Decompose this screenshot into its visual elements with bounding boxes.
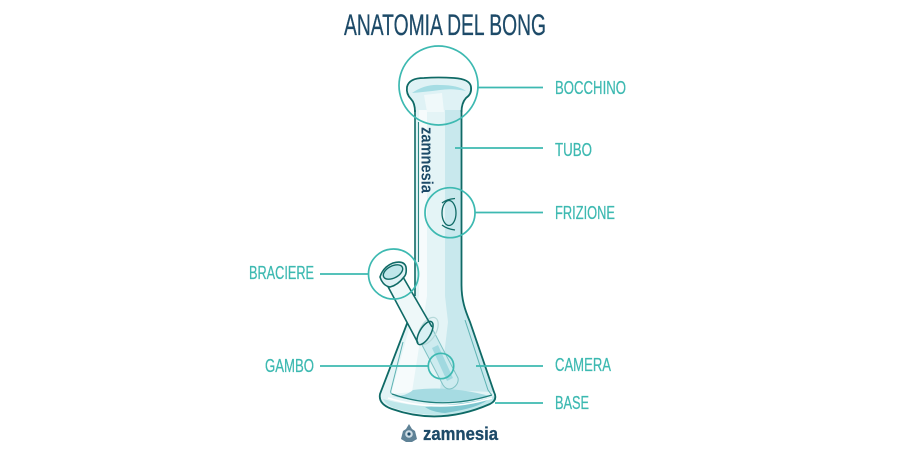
callout: tubo	[455, 140, 592, 160]
logo wordmark: zamnesia	[423, 424, 499, 444]
glass body fill	[380, 100, 495, 416]
joint ring	[414, 314, 442, 348]
callout: gambo: GAMBO	[265, 356, 314, 376]
mouth water	[412, 85, 466, 93]
callout: frizione	[425, 188, 615, 238]
callout: base: BASE	[555, 393, 589, 413]
footer logo	[401, 424, 499, 444]
mouthpiece inside fill	[408, 79, 471, 110]
tube inner left line	[418, 122, 420, 262]
lower stem fill	[422, 330, 458, 389]
callout: bocchino: BOCCHINO	[555, 78, 626, 98]
stem joint fill	[414, 319, 436, 347]
tube left outline	[414, 110, 416, 296]
callout: braciere: BRACIERE	[249, 263, 314, 283]
base white line	[388, 398, 492, 406]
chamber inner lines	[391, 320, 492, 395]
mouthpiece outline	[407, 78, 471, 112]
bong illustration	[380, 78, 495, 416]
callout: braciere	[249, 249, 418, 299]
mouthpiece	[407, 78, 471, 112]
base inner line	[392, 394, 492, 403]
bowl opening	[381, 262, 405, 282]
callout: camera: CAMERA	[555, 355, 611, 375]
callout: base	[495, 393, 589, 413]
callout: bocchino	[399, 46, 626, 125]
grip marks	[442, 198, 456, 230]
chamber outer outline	[380, 110, 495, 416]
callout: camera	[476, 355, 611, 375]
title: ANATOMIA DEL BONG	[344, 9, 546, 42]
zamnesia vertical brand: zamnesia	[418, 127, 436, 193]
water in base	[392, 388, 490, 402]
bowl	[380, 262, 406, 287]
base glass thickness	[383, 396, 494, 415]
callout: gambo	[265, 353, 454, 379]
base dark band	[425, 398, 490, 413]
neck highlight	[424, 93, 444, 112]
lower stem core	[432, 345, 453, 381]
white highlight	[391, 108, 427, 394]
callout: frizione: FRIZIONE	[555, 203, 615, 223]
stem upper outline	[385, 277, 432, 343]
logo icon	[401, 424, 417, 442]
darker glass shading	[440, 100, 493, 392]
callout: tubo: TUBO	[555, 140, 592, 160]
downstem	[380, 262, 458, 389]
lower stem outline	[422, 330, 458, 389]
upper stem fill	[385, 276, 432, 342]
